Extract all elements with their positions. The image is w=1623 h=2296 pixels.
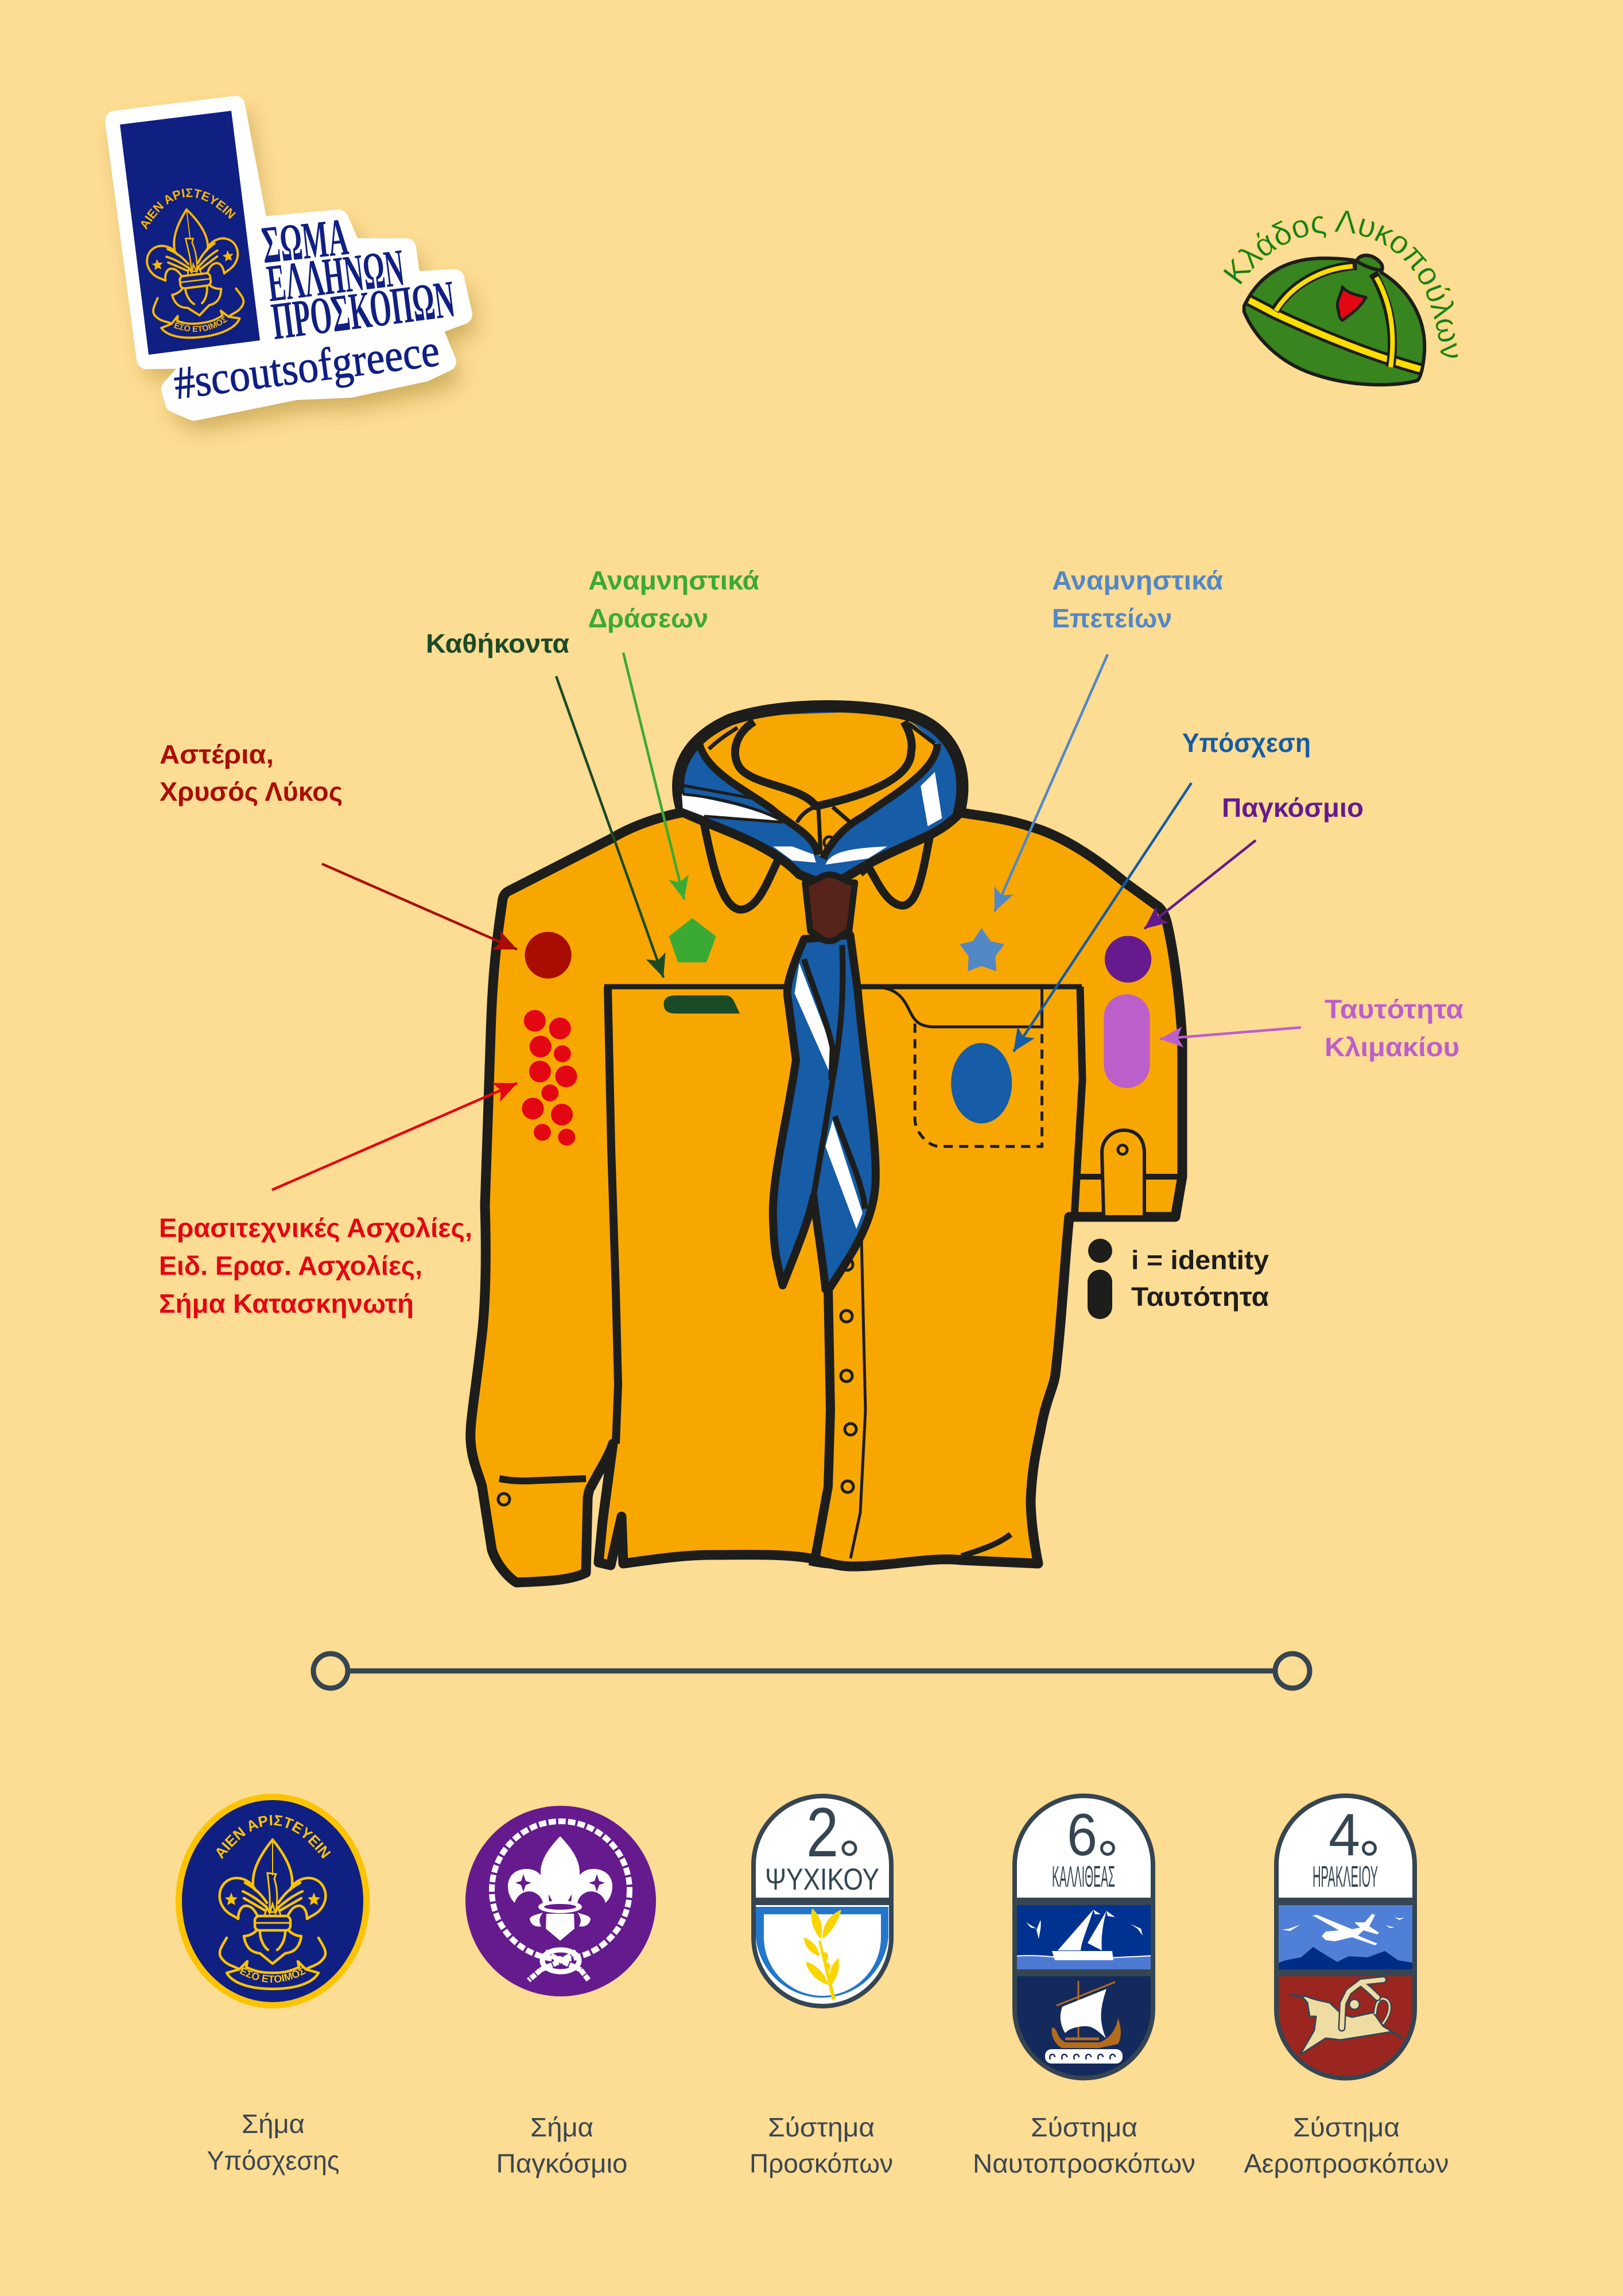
legend: i = identity: Ταυτότητα bbox=[1131, 1282, 1269, 1312]
badge: sea scouts system: 6 bbox=[1067, 1802, 1097, 1868]
timeline divider bbox=[313, 1654, 1310, 1688]
caption: Σήμα Υπόσχεσης: Υπόσχεσης bbox=[207, 2146, 340, 2175]
caption: Σύστημα Ναυτοπροσκόπων: Σύστημα bbox=[1031, 2112, 1137, 2142]
logo: scouts of greece sticker: #scoutsofgreece bbox=[171, 325, 442, 409]
label: Αστέρια, Χρυσός Λύκος: Αστέρια, bbox=[160, 739, 274, 769]
icon: airplane bbox=[1313, 1914, 1379, 1945]
label: Ταυτότητα Κλιμακίου bbox=[1325, 994, 1463, 1062]
label: Παγκόσμιο: Παγκόσμιο bbox=[1222, 793, 1364, 823]
legend: i = identity: i = identity bbox=[1131, 1245, 1269, 1275]
badge: blue star bbox=[960, 928, 1004, 971]
icon: olive branch bbox=[804, 1909, 841, 2000]
pocket bbox=[878, 987, 1042, 1146]
label: Αστέρια, Χρυσός Λύκος bbox=[160, 739, 343, 806]
badge: air scouts system bbox=[1274, 1796, 1417, 2078]
icon: ancient ship bbox=[1045, 1981, 1123, 2064]
neck and collar bbox=[678, 706, 962, 887]
logo: scouts of greece sticker: ΠΡΟΣΚΟΠΩΝ bbox=[269, 269, 458, 351]
caption: Σύστημα Προσκόπων: Σύστημα bbox=[768, 2112, 875, 2142]
icon: green cap bbox=[1244, 255, 1424, 385]
label: Αναμνηστικά Δράσεων: Αναμνηστικά bbox=[588, 565, 759, 595]
neckerchief tails bbox=[773, 935, 876, 1289]
shirt illustration bbox=[471, 706, 1182, 1583]
caption: Σύστημα Αεροπροσκόπων: Σύστημα bbox=[1293, 2112, 1400, 2142]
badge: promise oval: ΕΣΟ ΕΤΟΙΜΟΣ bbox=[240, 1967, 306, 1983]
caption: Σύστημα Ναυτοπροσκόπων bbox=[973, 2112, 1195, 2178]
branch title: Κλάδος Λυκοπούλων bbox=[1222, 210, 1458, 358]
label: Αστέρια, Χρυσός Λύκος: Χρυσός Λύκος bbox=[160, 777, 343, 806]
badge: promise oval bbox=[176, 1794, 370, 2008]
label: Ταυτότητα Κλιμακίου: Ταυτότητα bbox=[1325, 994, 1463, 1024]
legend: i = identity bbox=[1088, 1239, 1269, 1319]
label: Υπόσχεση: Υπόσχεση bbox=[1182, 728, 1311, 758]
caption: Σήμα Παγκόσμιο: Σήμα bbox=[530, 2112, 593, 2142]
caption: Σύστημα Αεροπροσκόπων: Αεροπροσκόπων bbox=[1244, 2148, 1449, 2178]
logo: scouts of greece sticker: ΕΣΟ ΕΤΟΙΜΟΣ bbox=[174, 316, 227, 332]
badge: world scout bbox=[465, 1806, 656, 1996]
shirt collar points bbox=[704, 824, 930, 910]
caption: Σύστημα Προσκόπων bbox=[750, 2112, 893, 2178]
logo: cub scouts cap bbox=[1222, 210, 1458, 387]
icon: black i bbox=[1088, 1239, 1112, 1319]
label: hobbies bbox=[159, 1213, 472, 1318]
label: hobbies: Σήμα Κατασκηνωτή bbox=[159, 1289, 414, 1318]
shirt buttons bbox=[498, 1145, 1127, 1505]
sleeve tab bbox=[1102, 1130, 1144, 1215]
caption: Σύστημα Αεροπροσκόπων bbox=[1244, 2112, 1449, 2178]
badge: scouts system bbox=[751, 1793, 894, 2006]
label: Καθήκοντα: Καθήκοντα bbox=[426, 629, 569, 658]
caption: Σήμα Υπόσχεσης: Σήμα bbox=[242, 2109, 305, 2139]
shirt body and sleeves bbox=[471, 812, 1182, 1583]
badge: air scouts system: ΗΡΑΚΛΕΙΟΥ bbox=[1313, 1860, 1378, 1894]
icon: sailboat bbox=[1026, 1910, 1143, 1960]
badge: dark green duties bar bbox=[663, 995, 740, 1014]
caption: Σύστημα Ναυτοπροσκόπων: Ναυτοπροσκόπων bbox=[973, 2148, 1195, 2178]
badge: sea scouts system bbox=[1012, 1796, 1155, 2078]
label: Αναμνηστικά Δράσεων: Δράσεων bbox=[588, 603, 708, 633]
label: Αναμνηστικά Επετείων bbox=[1052, 565, 1223, 633]
badge: blue oval promise bbox=[951, 1043, 1012, 1123]
badge: green pentagon bbox=[669, 918, 716, 963]
caption: Σύστημα Προσκόπων: Προσκόπων bbox=[750, 2148, 893, 2178]
caption: Σήμα Υπόσχεσης bbox=[207, 2109, 340, 2175]
label: Αναμνηστικά Επετείων: Επετείων bbox=[1052, 603, 1172, 633]
icon: bull leaper bbox=[1290, 1980, 1404, 2055]
woggle bbox=[805, 875, 855, 941]
badges: red dots (hobbies) bbox=[522, 1010, 577, 1146]
caption: Σήμα Παγκόσμιο: Παγκόσμιο bbox=[496, 2148, 628, 2178]
label: hobbies: Ερασιτεχνικές Ασχολίες, bbox=[159, 1213, 472, 1243]
logo: scouts of greece sticker: ΣΩΜΑ bbox=[259, 207, 351, 274]
badge: red circle (stars, gold wolf) bbox=[525, 932, 572, 979]
label: Αναμνηστικά Δράσεων bbox=[588, 565, 759, 633]
badge: scouts system: 2 bbox=[806, 1793, 838, 1871]
caption: Σήμα Παγκόσμιο bbox=[496, 2112, 628, 2178]
badge: purple world circle bbox=[1105, 936, 1151, 983]
knot bbox=[529, 1950, 589, 1980]
scarf white stripes bbox=[682, 772, 942, 864]
label: Ταυτότητα Κλιμακίου: Κλιμακίου bbox=[1325, 1032, 1459, 1062]
badge: orchid identity pill bbox=[1104, 994, 1150, 1088]
label: hobbies: Ειδ. Ερασ. Ασχολίες, bbox=[159, 1251, 422, 1281]
badge: air scouts system: 4 bbox=[1329, 1802, 1360, 1868]
badge: promise oval: ΑΙΕΝ ΑΡΙΣΤΕΥΕΙΝ bbox=[216, 1815, 331, 1859]
arrows bbox=[272, 653, 1301, 1190]
badge: sea scouts system: ΚΑΛΛΙΘΕΑΣ bbox=[1052, 1860, 1115, 1894]
logo: scouts of greece sticker bbox=[105, 96, 484, 439]
label: Αναμνηστικά Επετείων: Αναμνηστικά bbox=[1052, 565, 1223, 595]
badge positions, pocket, collar and scarf bbox=[522, 706, 1151, 1289]
badge: scouts system: ΨΥΧΙΚΟΥ bbox=[765, 1863, 879, 1896]
logo: scouts of greece sticker: ΕΛΛΗΝΩΝ bbox=[264, 238, 407, 313]
logo: scouts of greece sticker: ΑΙΕΝ ΑΡΙΣΤΕΥΕΙΝ bbox=[141, 188, 236, 230]
